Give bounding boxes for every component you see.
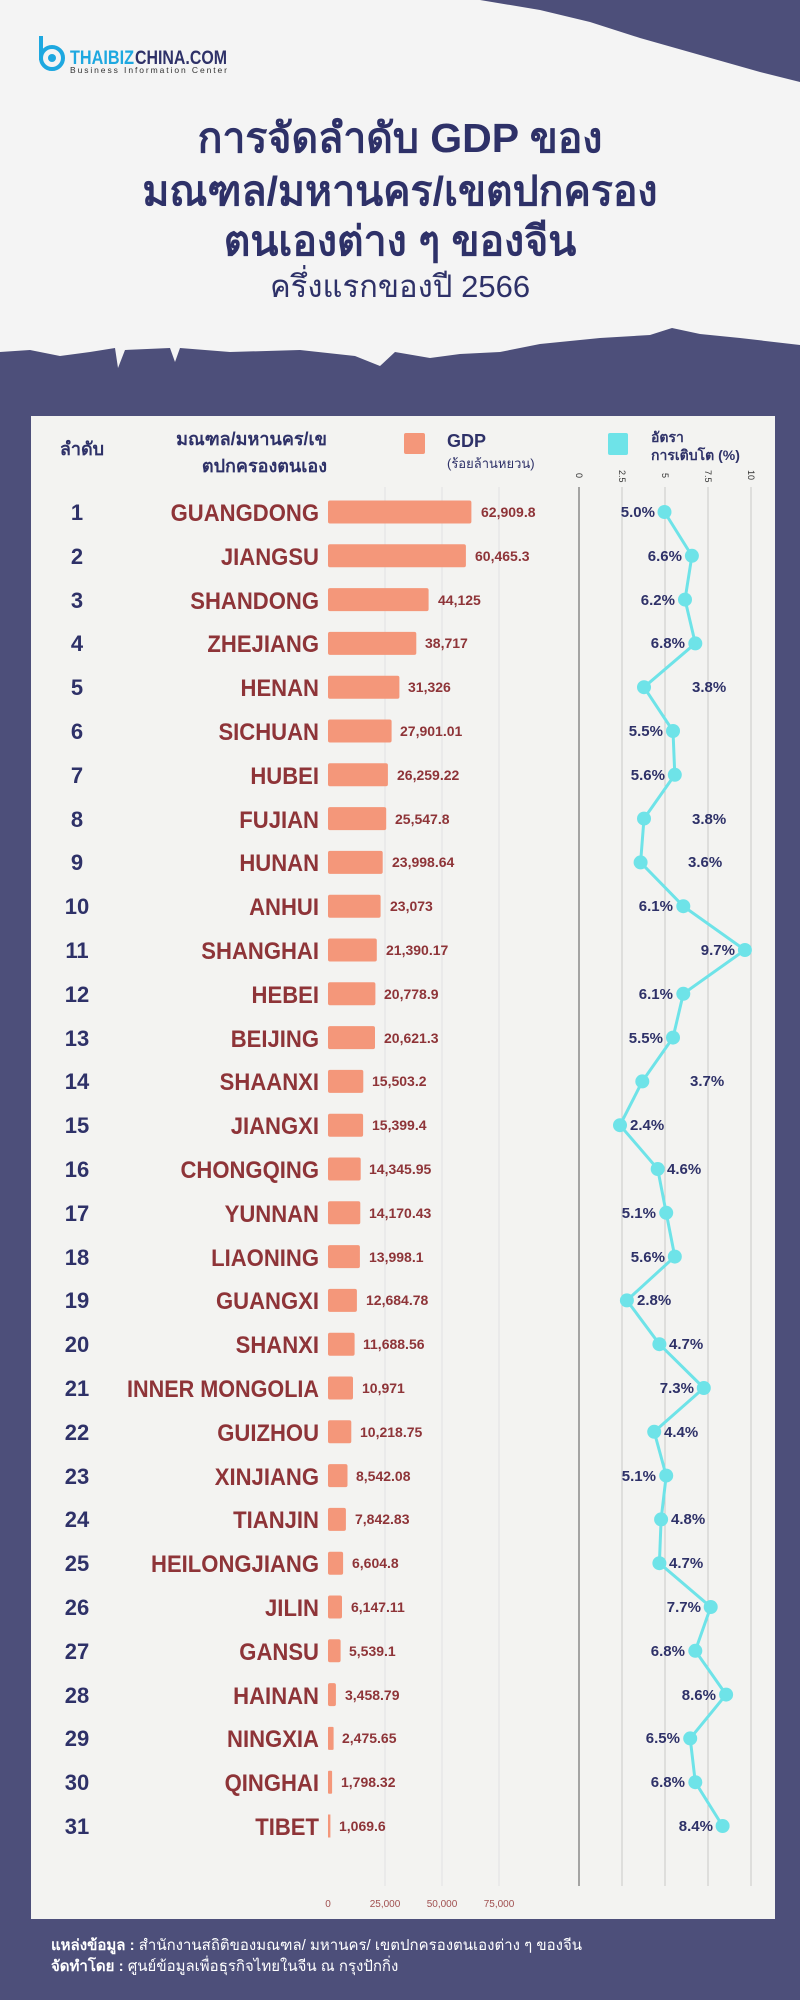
province names: GANSU [239,1638,319,1665]
growth line chart: 4.7% [669,1555,703,1572]
GDP value labels: 62,909.8 [481,504,536,520]
growth axis ticks [574,470,756,483]
GDP value labels: 12,684.78 [366,1292,428,1308]
growth line chart: 6.5% [646,1730,680,1747]
legend: growth [608,429,740,463]
rank numbers: 5 [71,675,83,700]
rank numbers: 14 [65,1069,90,1094]
province names: HEBEI [252,981,319,1008]
growth line chart [613,504,752,1835]
growth line chart: 5.1% [622,1205,656,1222]
growth line chart: 4.6% [667,1161,701,1178]
growth line chart: 7.7% [667,1599,701,1616]
growth line chart: 4.7% [669,1336,703,1353]
GDP value labels: 20,778.9 [384,986,439,1002]
rank numbers: 15 [65,1113,89,1138]
growth line chart: 8.4% [679,1818,713,1835]
province names: ZHEJIANG [207,630,319,657]
province names: NINGXIA [227,1725,319,1752]
header: province column [176,429,327,476]
logo: Business Information Center [70,65,227,75]
GDP value labels: 14,345.95 [369,1161,431,1177]
footer: source and credits: แหล่งข้อมูล : สำนักงานสถิติของมณฑล/ มหานคร/ เขตปกครองตนเองต่าง ๆ ของจีน [51,1937,582,1955]
province names: HEILONGJIANG [151,1550,319,1577]
rank numbers: 18 [65,1245,89,1270]
growth line chart: 2.8% [637,1292,671,1309]
GDP value labels: 31,326 [408,679,451,695]
rank numbers: 7 [71,763,83,788]
rank numbers: 6 [71,719,83,744]
growth axis ticks: 7.5 [703,470,713,483]
GDP axis labels: 25,000 [370,1899,401,1910]
province names: QINGHAI [225,1769,319,1796]
province names: TIBET [255,1813,319,1840]
growth line chart: 5.1% [622,1468,656,1485]
rank numbers: 19 [65,1288,89,1313]
GDP value labels: 8,542.08 [356,1468,411,1484]
title: การจัดลำดับ GDP ของ [198,115,602,161]
GDP value labels: 1,798.32 [341,1774,396,1790]
province names: CHONGQING [180,1156,319,1183]
legend: GDP: (ร้อยล้านหยวน) [447,456,535,471]
growth line chart: 5.6% [631,767,665,784]
title [142,115,658,304]
rank numbers: 3 [71,588,83,613]
GDP value labels: 26,259.22 [397,767,459,783]
rank numbers: 16 [65,1157,89,1182]
legend: growth: การเติบโต (%) [651,446,740,463]
GDP value labels: 25,547.8 [395,811,450,827]
GDP value labels: 14,170.43 [369,1205,431,1221]
GDP value labels: 11,688.56 [363,1336,425,1352]
province names: ANHUI [249,893,319,920]
province names: JIANGXI [231,1112,319,1139]
province names: TIANJIN [233,1506,319,1533]
growth line chart: 6.8% [651,635,685,652]
growth line chart: 6.1% [639,898,673,915]
grid lines [385,487,751,1886]
GDP bars [328,500,471,1838]
growth line chart: 3.8% [692,679,726,696]
province names: HENAN [241,674,319,701]
footer: source and credits [51,1937,582,1976]
growth axis ticks: 10 [746,470,756,480]
rank numbers: 20 [65,1332,89,1357]
growth line chart: 6.8% [651,1643,685,1660]
GDP value labels: 10,218.75 [360,1424,422,1440]
rank numbers: 1 [71,500,83,525]
logo [39,36,227,75]
GDP axis labels [325,1899,515,1910]
growth line chart: 6.1% [639,986,673,1003]
province names: BEIJING [231,1025,319,1052]
GDP value labels: 44,125 [438,592,481,608]
GDP value labels: 15,503.2 [372,1073,427,1089]
growth line chart: 3.6% [688,854,722,871]
footer: source and credits: จัดทำโดย : ศูนย์ข้อมูลเพื่อธุรกิจไทยในจีน ณ กรุงปักกิ่ง [51,1955,398,1976]
legend: GDP [404,431,535,471]
legend: growth: อัตรา [651,429,684,445]
rank numbers: 26 [65,1595,89,1620]
rank numbers: 22 [65,1420,89,1445]
GDP value labels: 15,399.4 [372,1117,427,1133]
GDP value labels: 2,475.65 [342,1730,397,1746]
GDP axis labels: 0 [325,1899,331,1910]
province names: JILIN [265,1594,319,1621]
GDP value labels: 27,901.01 [400,723,462,739]
province names: HUBEI [250,762,319,789]
growth line chart: 6.6% [648,548,682,565]
growth line chart: 7.3% [660,1380,694,1397]
growth line chart: 8.6% [682,1687,716,1704]
rank numbers: 13 [65,1026,89,1051]
province names: HAINAN [233,1682,319,1709]
rank numbers: 27 [65,1639,89,1664]
growth axis ticks: 2.5 [617,470,627,483]
growth line chart: 9.7% [701,942,735,959]
rank numbers: 11 [65,938,89,963]
rank numbers: 21 [65,1376,89,1401]
rank numbers: 29 [65,1726,89,1751]
province names: SHANXI [236,1331,319,1358]
rank numbers: 25 [65,1551,89,1576]
rank numbers: 2 [71,544,83,569]
GDP value labels: 6,604.8 [352,1555,399,1571]
growth line chart: 5.5% [629,1030,663,1047]
rank numbers: 4 [71,631,84,656]
province names: SHANDONG [190,587,319,614]
GDP value labels: 60,465.3 [475,548,530,564]
logo: THAIBIZ [70,48,134,69]
province names: HUNAN [239,849,319,876]
province names: INNER MONGOLIA [127,1375,319,1402]
growth line chart: 6.2% [641,592,675,609]
GDP axis labels: 50,000 [427,1899,458,1910]
province names: SHANGHAI [201,937,319,964]
decoration: top-right torn shape [480,0,800,82]
rank numbers: 30 [65,1770,89,1795]
GDP value labels: 3,458.79 [345,1687,400,1703]
title: ตนเองต่าง ๆ ของจีน [224,218,576,264]
GDP value labels: 23,998.64 [392,854,454,870]
rank numbers: 17 [65,1201,89,1226]
rank numbers [65,500,90,1839]
rank numbers: 8 [71,807,83,832]
growth line chart: 5.5% [629,723,663,740]
rank numbers: 10 [65,894,89,919]
growth line chart: 5.0% [621,504,655,521]
growth axis ticks: 0 [574,473,584,478]
growth line chart: 3.8% [692,811,726,828]
title: ครึ่งแรกของปี 2566 [270,265,530,304]
growth axis ticks: 5 [660,473,670,478]
rank numbers: 31 [65,1814,89,1839]
rank numbers: 28 [65,1683,89,1708]
header: province column: ตปกครองตนเอง [202,456,327,476]
growth line chart: 4.8% [671,1511,705,1528]
province names [127,499,319,1840]
province names: SHAANXI [220,1068,319,1095]
GDP value labels: 20,621.3 [384,1030,439,1046]
title: มณฑล/มหานคร/เขตปกครอง [142,168,658,214]
logo: CHINA.COM [135,48,227,69]
GDP value labels: 13,998.1 [369,1249,424,1265]
province names: FUJIAN [239,806,319,833]
province names: GUANGDONG [171,499,319,526]
GDP value labels: 7,842.83 [355,1511,410,1527]
GDP value labels: 21,390.17 [386,942,448,958]
province names: LIAONING [211,1244,319,1271]
growth line chart: 3.7% [690,1073,724,1090]
header: province column: มณฑล/มหานคร/เข [176,429,327,449]
growth line chart: 6.8% [651,1774,685,1791]
rank numbers: 24 [65,1507,90,1532]
header: rank column: ลำดับ [60,439,104,459]
GDP value labels: 23,073 [390,898,433,914]
rank numbers: 9 [71,850,83,875]
panel: chart [31,416,775,1919]
province names: GUIZHOU [217,1419,319,1446]
province names: SICHUAN [218,718,319,745]
GDP value labels: 5,539.1 [349,1643,396,1659]
province names: YUNNAN [225,1200,319,1227]
GDP axis labels: 75,000 [484,1899,515,1910]
GDP value labels [339,504,536,1834]
GDP value labels: 1,069.6 [339,1818,386,1834]
GDP value labels: 6,147.11 [351,1599,405,1615]
GDP value labels: 38,717 [425,635,468,651]
province names: XINJIANG [215,1463,319,1490]
growth line chart: 4.4% [664,1424,698,1441]
growth line chart: 2.4% [630,1117,664,1134]
GDP value labels: 10,971 [362,1380,405,1396]
province names: JIANGSU [221,543,319,570]
growth line chart: 5.6% [631,1249,665,1266]
rank numbers: 23 [65,1464,89,1489]
legend: GDP: GDP [447,431,486,451]
province names: GUANGXI [216,1287,319,1314]
rank numbers: 12 [65,982,89,1007]
